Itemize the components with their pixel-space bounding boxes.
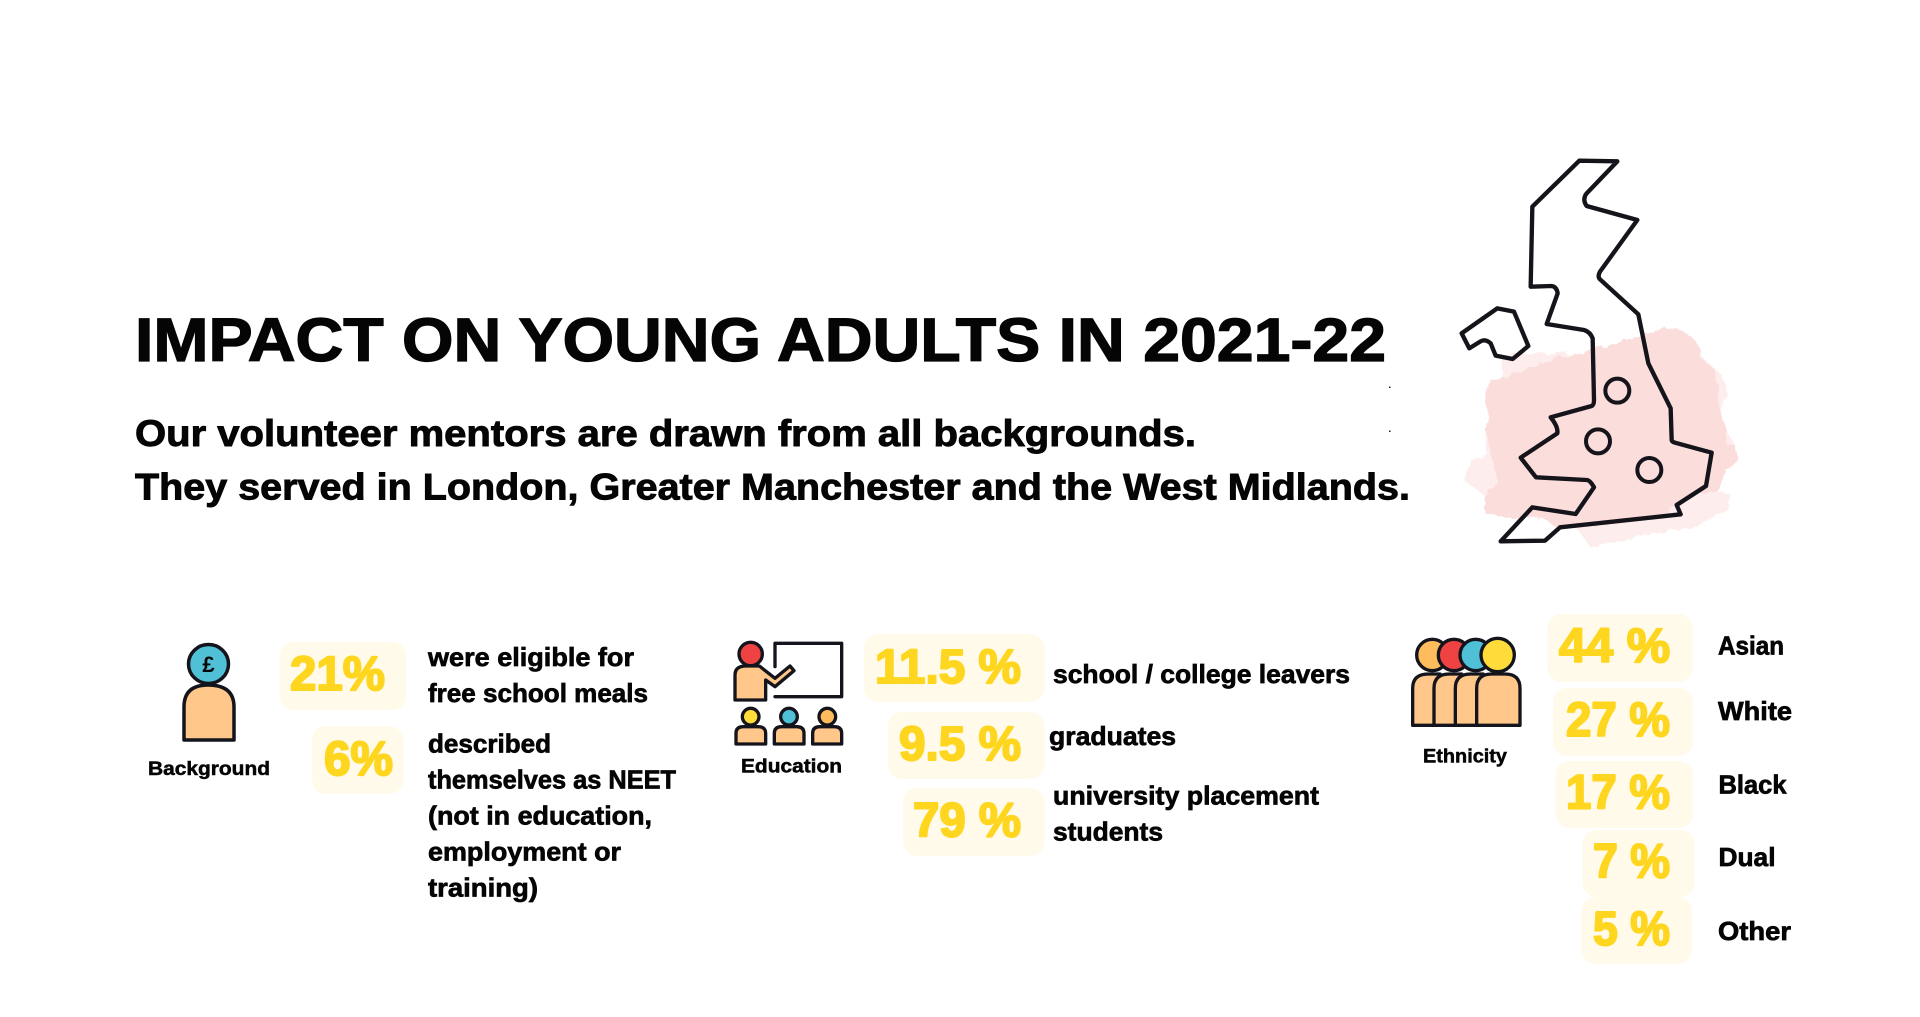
stat: 7% Dual [1582,830,1776,897]
stat: 44% Asian: 44 % [1559,620,1670,673]
stat text: university placement students: university placement [1053,780,1319,810]
stat: 9.5%: 9.5 % [899,718,1021,771]
stat text: free school meals: free school meals [428,678,648,708]
stat: 5% Other: 5 % [1593,903,1670,956]
stat: 44% Asian: Asian [1718,630,1784,660]
map of Great Britain and Ireland [1462,161,1739,547]
stat: 11.5%: 11.5 % [875,641,1021,694]
stat: 79% [903,788,1044,856]
stat text: NEET: employment or [428,836,621,866]
stat: 17% Black: Black [1718,770,1787,800]
label: Background: Background [148,759,270,780]
stat: 27% White [1553,688,1792,756]
map outline: Ireland [1462,308,1528,359]
icon: person with pound coin head: £ [202,652,215,677]
panel: education [735,634,1350,856]
stat: 9.5% [888,712,1044,779]
stat: 6%: 6% [324,733,393,786]
title: IMPACT ON YOUNG ADULTS IN 2021-22 [135,306,1386,374]
stat: 21%: 21% [290,648,385,701]
stat text: NEET: (not in education, [428,800,652,830]
stat: 7% Dual: 7 % [1593,836,1670,888]
stat text: free school meals: were eligible for [427,642,634,672]
location markers [1586,379,1661,482]
stat text: graduates: graduates [1049,721,1176,751]
stat: 44% Asian [1548,614,1784,682]
map outline [1501,161,1712,541]
subtitle text [135,413,1410,508]
stat text: university placement students [1053,780,1319,846]
panel: ethnicity [1413,614,1792,964]
stat: 11.5% [864,634,1044,702]
stat: 21% [280,642,406,710]
stat: 27% White: White [1718,696,1792,726]
stat text: university placement students: students [1053,816,1163,846]
stat text: NEET [428,728,676,902]
stat text: NEET: training) [428,872,538,902]
stat: 79%: 79 % [913,794,1021,848]
stat: 27% White: 27 % [1566,694,1670,747]
panel: background [148,642,676,902]
stat text: NEET: themselves as NEET [428,764,676,794]
icon: teacher at whiteboard with students [735,642,842,744]
label: Education: Education [741,756,842,778]
stat text: school leavers: school / college leavers [1053,659,1350,689]
label: Ethnicity: Ethnicity [1423,746,1507,768]
icon: group of four people [1413,638,1520,725]
stat: 17% Black [1556,761,1787,828]
stat: 5% Other: Other [1718,916,1791,946]
subtitle text: Our volunteer mentors are drawn from all backgrounds. [135,413,1196,454]
stat: 17% Black: 17 % [1566,766,1670,820]
map watercolour wash [1463,327,1739,547]
stat text: free school meals [427,642,648,708]
icon: person with pound coin head [184,644,234,740]
stat: 7% Dual: Dual [1718,842,1776,872]
stat text: NEET: described [428,728,551,758]
subtitle text: They served in London, Greater Manchester and the West Midlands. [135,466,1410,508]
stat: 5% Other [1582,897,1791,964]
stat: 6% [312,726,404,794]
